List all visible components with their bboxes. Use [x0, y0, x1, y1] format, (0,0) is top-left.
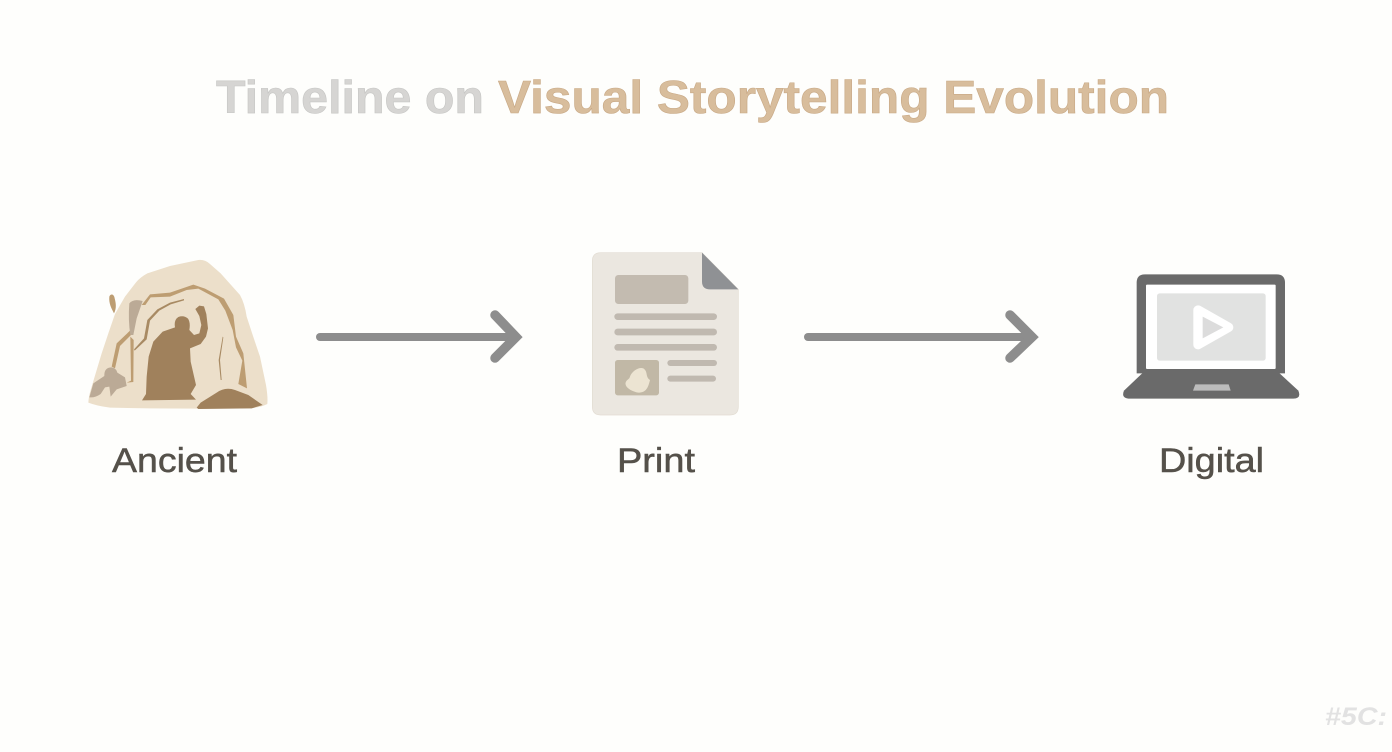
arrow: ancient to print [320, 315, 516, 358]
title: Timeline on [216, 71, 484, 123]
label: Print: Print [617, 442, 696, 480]
label: Digital: Digital [1159, 442, 1264, 480]
icon: cave painting [88, 260, 267, 409]
title: Visual Storytelling Evolution [498, 71, 1169, 123]
label: Ancient: Ancient [112, 442, 238, 480]
title [216, 71, 1169, 123]
watermark: #5C: [1325, 703, 1387, 731]
arrow: print to digital [808, 315, 1032, 358]
icon: printed document [592, 253, 738, 415]
icon: laptop with video player [1123, 274, 1299, 399]
